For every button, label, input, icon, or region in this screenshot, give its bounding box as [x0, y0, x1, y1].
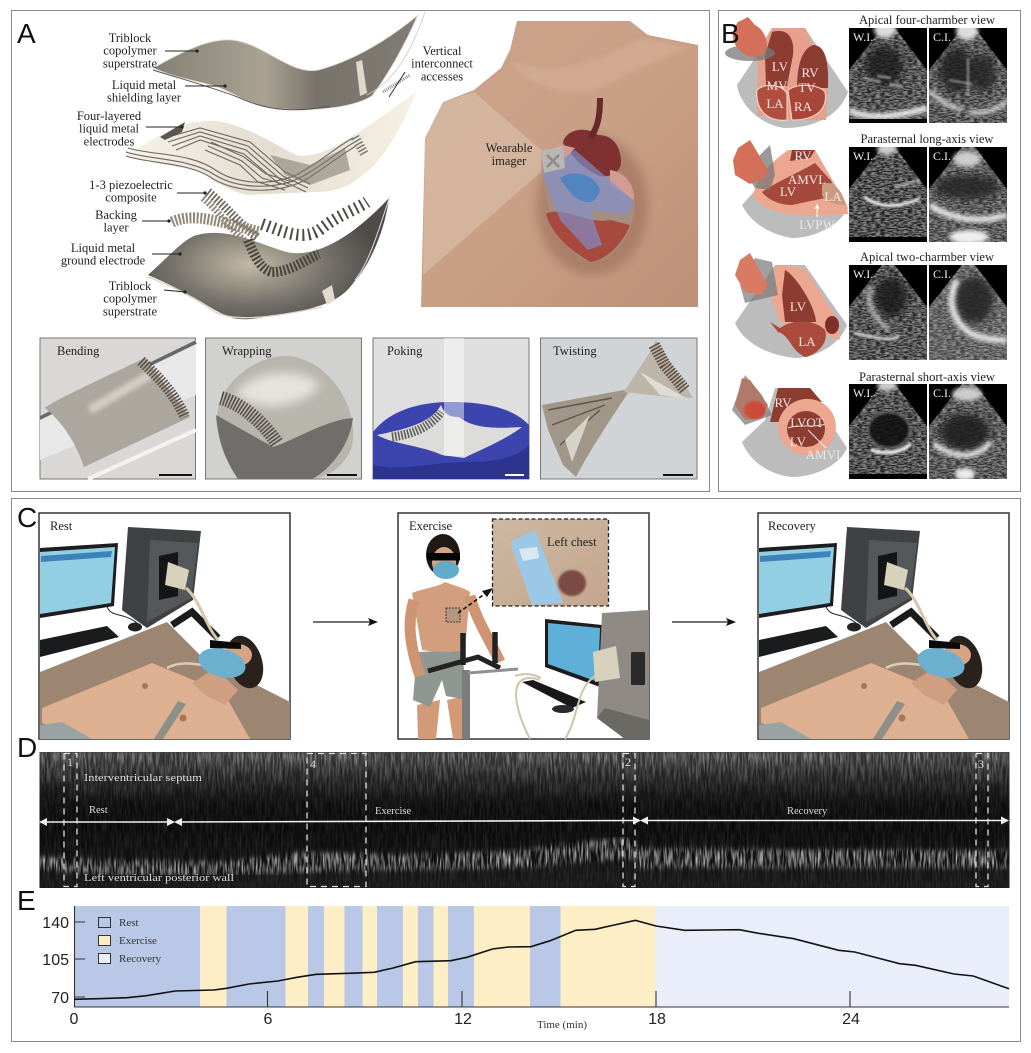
W.I. ultrasound: [849, 147, 927, 242]
mask: [433, 561, 459, 579]
exploded device stack: [126, 12, 425, 319]
ground electrode film: [148, 198, 389, 319]
y axis labels: 105: [42, 952, 69, 969]
C.I. ultrasound: C.I.: [933, 386, 951, 400]
anatomy illustration: RV: [801, 65, 819, 80]
heart shadow: [536, 135, 648, 275]
heart body: [543, 146, 635, 263]
dashed window 1: [64, 754, 77, 886]
W.I. ultrasound: W.I.: [853, 386, 873, 400]
y axis labels: 70: [51, 990, 69, 1007]
electrode array: [221, 398, 277, 443]
electrode array: [141, 361, 185, 417]
W.I. ultrasound: W.I.: [853, 267, 873, 281]
photo: exercise: [398, 513, 649, 739]
neck shadows: [510, 38, 690, 93]
piezoelectric pillars: [172, 192, 367, 272]
row: parasternal short-axis: [732, 370, 1007, 480]
person torso: [412, 582, 470, 652]
panel letter A: A: [17, 18, 36, 49]
bottom film edge: [355, 196, 390, 280]
rest span arrow: Rest: [89, 805, 108, 816]
W.I. ultrasound: W.I.: [853, 149, 873, 163]
anatomy illustration: LV: [790, 299, 807, 314]
arrow rest to exercise: [313, 618, 378, 626]
black bar: [427, 553, 460, 560]
device screen slot: [631, 652, 645, 685]
label shielding: shielding layer: [107, 91, 182, 105]
nipple: [558, 570, 586, 596]
silver dome: [217, 356, 353, 479]
label vias: accesses: [421, 69, 463, 83]
vertical access pads: [383, 75, 410, 92]
chest with heart: [421, 21, 698, 307]
electrode array: [654, 345, 685, 390]
legend: Exercise: [119, 935, 157, 947]
label piezo: 1-3 piezoelectric: [89, 178, 173, 192]
electrode film: [126, 92, 416, 195]
panel letter E: E: [17, 885, 36, 916]
anatomy illustration: LV: [780, 184, 797, 199]
view title: Apical four-charmber view: [859, 13, 995, 27]
panel A border: [12, 10, 710, 492]
anatomy illustration: LVOT: [790, 415, 824, 430]
panel A: [17, 12, 698, 479]
C.I. ultrasound: C.I.: [933, 149, 951, 163]
chest: [421, 21, 698, 307]
anatomy illustration: TV: [798, 80, 816, 95]
axes and ticks: [74, 906, 1009, 1007]
anatomy illustration: [725, 17, 848, 128]
scale bar: [505, 474, 524, 476]
atrium: [563, 130, 621, 176]
y axis labels: [42, 915, 69, 1007]
anatomy illustration: LVPW: [799, 217, 836, 232]
W.I. ultrasound: [849, 265, 927, 360]
anatomy illustration: LV: [790, 434, 807, 449]
C.I. ultrasound: C.I.: [933, 267, 951, 281]
label backing: Backing: [95, 208, 137, 222]
panel D: [17, 732, 1010, 888]
sensor dashed square: [446, 608, 460, 622]
x axis labels: 6: [264, 1011, 273, 1028]
septum label: Interventricular septum: [84, 773, 202, 784]
x axis labels: 24: [842, 1011, 860, 1028]
wall label: Left ventricular posterior wall: [84, 873, 234, 884]
label wearable imager: imager: [492, 154, 527, 168]
label triblock bottom: Triblock: [109, 279, 151, 293]
scale bar: [663, 474, 693, 476]
anatomy illustration: [733, 140, 848, 238]
small heart: [732, 375, 772, 425]
faint overall speckle: [40, 752, 1010, 888]
exercise span arrow: [174, 806, 641, 826]
scale bar: [327, 474, 357, 476]
beige module: [593, 646, 620, 682]
face: [432, 547, 456, 577]
panel letter D: D: [17, 732, 37, 763]
small heart: [725, 45, 775, 61]
heart rate curve: [74, 920, 1009, 999]
person arms: [410, 596, 500, 676]
arrow exercise to recovery: [672, 618, 736, 626]
twisting label: Twisting: [553, 344, 597, 358]
C.I. ultrasound: [929, 265, 1007, 360]
label triblock top: copolymer: [103, 44, 158, 58]
legend: Rest: [119, 917, 139, 929]
dashed arrow: [458, 588, 493, 613]
left chest label: Left chest: [547, 535, 597, 549]
poking label: Poking: [387, 344, 423, 358]
exercise span arrow: Exercise: [375, 806, 411, 817]
x axis labels: 0: [70, 1011, 79, 1028]
y axis labels: 140: [42, 915, 69, 932]
left fan: [542, 390, 628, 477]
label wearable imager: Wearable: [486, 141, 532, 155]
label triblock bottom: superstrate: [103, 304, 158, 318]
recovery label: Recovery: [768, 519, 817, 533]
anatomy illustration: AMVL: [788, 172, 826, 187]
photo: wrapping: [206, 338, 362, 479]
W.I. ultrasound: [849, 28, 927, 123]
trace cluster: [270, 148, 350, 185]
panel C: [17, 502, 1009, 739]
dashed window 3: [976, 754, 988, 886]
label triblock top: superstrate: [103, 56, 158, 70]
exercise label: Exercise: [409, 519, 452, 533]
ultrasound device: [597, 610, 649, 739]
photo: rest: [39, 513, 290, 739]
legend: [98, 917, 162, 965]
electrode traces: [126, 128, 356, 192]
C.I. ultrasound: C.I.: [933, 30, 951, 44]
window numbers: 3: [978, 757, 984, 771]
glass rod: [40, 340, 196, 460]
anatomy illustration: LA: [824, 189, 842, 204]
heart rate chart: [42, 906, 1009, 1031]
panel C D E border: [12, 498, 1020, 1042]
recovery span arrow: [640, 806, 1009, 824]
label triblock top: Triblock: [109, 31, 151, 45]
heart muscle: [546, 212, 630, 262]
anatomy illustration: MV: [767, 78, 788, 93]
computer monitor: [545, 619, 602, 687]
left chest inset: [492, 519, 608, 606]
panel letter C: C: [17, 502, 37, 533]
imaging plane blue: [542, 150, 633, 250]
panel E: [17, 885, 1009, 1031]
legend: Recovery: [119, 953, 162, 965]
septum streaks: [40, 752, 1010, 798]
anatomy illustration: RV: [774, 395, 792, 410]
stack labels: [61, 31, 473, 318]
panel letter B: B: [721, 18, 740, 49]
vessel: [590, 98, 600, 138]
person legs: [417, 695, 470, 739]
label vias: interconnect: [411, 57, 473, 71]
posterior wall band: [40, 837, 1009, 875]
anatomy illustration: LA: [798, 334, 816, 349]
window numbers: [67, 755, 984, 771]
rest label: Rest: [50, 519, 73, 533]
panel B: [721, 13, 1007, 480]
recovery span arrow: Recovery: [787, 806, 828, 817]
W.I. ultrasound: W.I.: [853, 30, 873, 44]
view title: Parasternal short-axis view: [859, 370, 995, 384]
anatomy illustration: RA: [794, 99, 813, 114]
bending label: Bending: [57, 344, 100, 358]
dashed window 2: [623, 754, 635, 886]
dashed window 4: [307, 754, 366, 886]
glass rod: [444, 338, 464, 456]
wrapping label: Wrapping: [222, 344, 272, 358]
panel B border: [718, 10, 1020, 492]
window numbers: 4: [310, 757, 316, 771]
silver sheet: [377, 405, 522, 458]
person head: [426, 534, 460, 576]
label backing: layer: [104, 221, 129, 235]
anatomy illustration: LA: [766, 96, 784, 111]
sheet: [45, 358, 190, 467]
view title: Apical two-charmber view: [860, 250, 994, 264]
phase bands: [74, 906, 1009, 1007]
label ground: Liquid metal: [71, 241, 135, 255]
person shorts: [413, 650, 467, 707]
photo: bending: [40, 338, 196, 479]
label shielding: Liquid metal: [112, 78, 176, 92]
rest span arrow: [39, 805, 175, 826]
imaging wedge: [423, 92, 541, 275]
x axis labels: 18: [648, 1011, 666, 1028]
label piezo: composite: [105, 191, 157, 205]
pink tissue: [555, 143, 634, 200]
right fan: [624, 340, 693, 398]
C.I. ultrasound: [929, 147, 1007, 242]
imager x mark: [547, 155, 559, 167]
rest scene: [40, 527, 290, 739]
window numbers: 1: [67, 755, 73, 769]
row: apical four-chamber: [725, 13, 1007, 128]
cables: [515, 674, 595, 739]
row: apical two-chamber: [735, 250, 1007, 360]
anatomy illustration: [732, 375, 847, 477]
leader lines: [142, 50, 405, 293]
label electrodes: Four-layered: [77, 109, 141, 123]
film edge: [367, 12, 425, 95]
bike: [428, 632, 518, 739]
M-mode strip: [39, 752, 1010, 888]
photo: twisting: [540, 338, 697, 479]
x axis labels: [70, 1011, 860, 1028]
anatomy illustration: LV: [772, 59, 789, 74]
label electrodes: liquid metal: [79, 122, 140, 136]
label vias: Vertical: [423, 44, 461, 58]
photo: poking: [373, 338, 529, 479]
label electrodes: electrodes: [84, 134, 134, 148]
C.I. ultrasound: [929, 28, 1007, 123]
W.I. ultrasound: [849, 384, 927, 479]
keyboard and mouse: [522, 680, 586, 708]
blue cup: [373, 402, 529, 479]
C.I. ultrasound: [929, 384, 1007, 479]
blue chamber: [560, 173, 600, 202]
label triblock bottom: copolymer: [103, 292, 158, 306]
dark lower half: [216, 415, 353, 479]
recovery scene: [759, 527, 1009, 739]
bonding pad cluster: [355, 137, 365, 155]
x axis title: Time (min): [537, 1019, 587, 1031]
label ground: ground electrode: [61, 254, 146, 268]
view title: Parasternal long-axis view: [860, 132, 994, 146]
window numbers: 2: [625, 755, 631, 769]
scale bar: [159, 474, 192, 476]
photo: recovery: [758, 513, 1009, 739]
small heart: [745, 145, 775, 190]
wearable imager patch: [541, 146, 565, 173]
row: parasternal long-axis: [733, 132, 1007, 244]
small heart: [740, 258, 778, 303]
electrode array: [392, 412, 441, 437]
anatomy illustration: AMVI: [806, 447, 840, 462]
top superstrate film: [153, 15, 418, 110]
anatomy illustration: [735, 253, 847, 358]
x axis labels: 12: [454, 1011, 472, 1028]
anatomy illustration: RV: [794, 148, 812, 163]
blue patch: [510, 530, 563, 605]
top pad: [160, 122, 185, 140]
